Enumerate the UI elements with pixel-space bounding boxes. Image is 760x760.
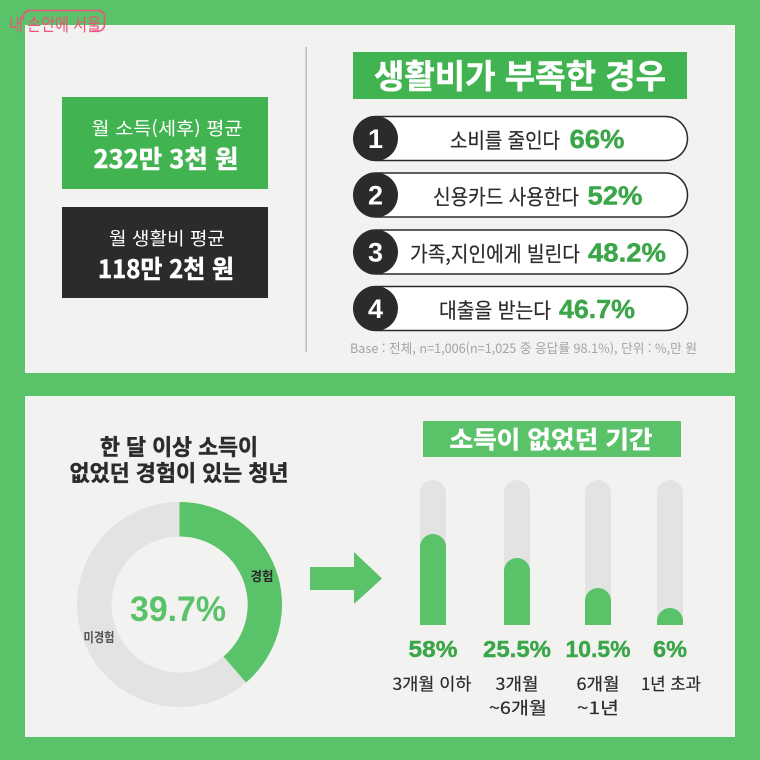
list item 4 bbox=[353, 286, 688, 331]
heading: youth experience bbox=[70, 430, 288, 488]
living expense box bbox=[62, 207, 268, 298]
bar 6% bbox=[641, 480, 701, 695]
logo: 내 손안에 서울 bbox=[9, 11, 101, 37]
list item 2: 2 bbox=[368, 180, 383, 210]
income box: 월 소득(세후) 평균 bbox=[92, 115, 242, 141]
living expense box: 118만 2천 원 bbox=[98, 250, 234, 286]
list item 2: 신용카드 사용한다 bbox=[433, 182, 579, 212]
bar 58%: 3개월 이하 bbox=[392, 670, 472, 695]
base note: Base : 전체, n=1,006(n=1,025 중 응답률 98.1%), 단위 : %,만 원 bbox=[350, 338, 697, 357]
bar 58%: 58% bbox=[408, 636, 458, 662]
bar 25.5%: 25.5% bbox=[483, 636, 551, 662]
donut chart bbox=[77, 502, 282, 707]
bar 10.5%: 10.5% bbox=[566, 636, 630, 662]
bar 6%: 1년 초과 bbox=[641, 670, 701, 695]
bar 10.5%: ~1년 bbox=[577, 694, 619, 719]
list item 1 bbox=[353, 116, 688, 161]
heading: youth experience: 한 달 이상 소득이 bbox=[100, 430, 258, 462]
income box: 232만 3천 원 bbox=[94, 140, 238, 176]
panel: monthly income and shortfall bbox=[25, 25, 735, 373]
heading: no income period bbox=[423, 420, 681, 457]
living expense box: 월 생활비 평균 bbox=[109, 225, 225, 251]
list item 1: 소비를 줄인다 bbox=[450, 125, 560, 155]
income box bbox=[62, 97, 268, 189]
bar 25.5% bbox=[483, 480, 551, 719]
list item 3: 3 bbox=[368, 238, 383, 268]
list item 3: 가족,지인에게 빌린다 bbox=[410, 238, 580, 268]
bar 58% bbox=[392, 480, 472, 695]
bar 10.5% bbox=[566, 480, 630, 719]
bar 10.5%: 6개월 bbox=[576, 670, 620, 695]
heading: youth experience: 없었던 경험이 있는 청년 bbox=[70, 456, 288, 488]
donut chart: 39.7% bbox=[130, 590, 226, 629]
bar 25.5%: ~6개월 bbox=[489, 694, 547, 719]
bar 25.5%: 3개월 bbox=[496, 670, 538, 695]
list item 4: 46.7% bbox=[559, 294, 635, 324]
list item 4: 대출을 받는다 bbox=[439, 295, 551, 325]
list item 3 bbox=[353, 230, 688, 274]
list item 1: 1 bbox=[368, 124, 383, 154]
arrow bbox=[310, 552, 382, 604]
list item 4: 4 bbox=[368, 294, 383, 324]
heading: shortfall: 생활비가 부족한 경우 bbox=[374, 50, 666, 98]
list item 3: 48.2% bbox=[588, 238, 666, 268]
bar 6%: 6% bbox=[653, 636, 687, 662]
heading: no income period: 소득이 없었던 기간 bbox=[450, 420, 652, 455]
panel: youth without income bbox=[25, 396, 735, 737]
donut chart: 미경험 bbox=[84, 627, 114, 646]
list item 2: 52% bbox=[588, 180, 642, 210]
list item 2 bbox=[353, 172, 688, 218]
list item 1: 66% bbox=[570, 124, 624, 154]
donut chart: 경험 bbox=[250, 566, 274, 585]
